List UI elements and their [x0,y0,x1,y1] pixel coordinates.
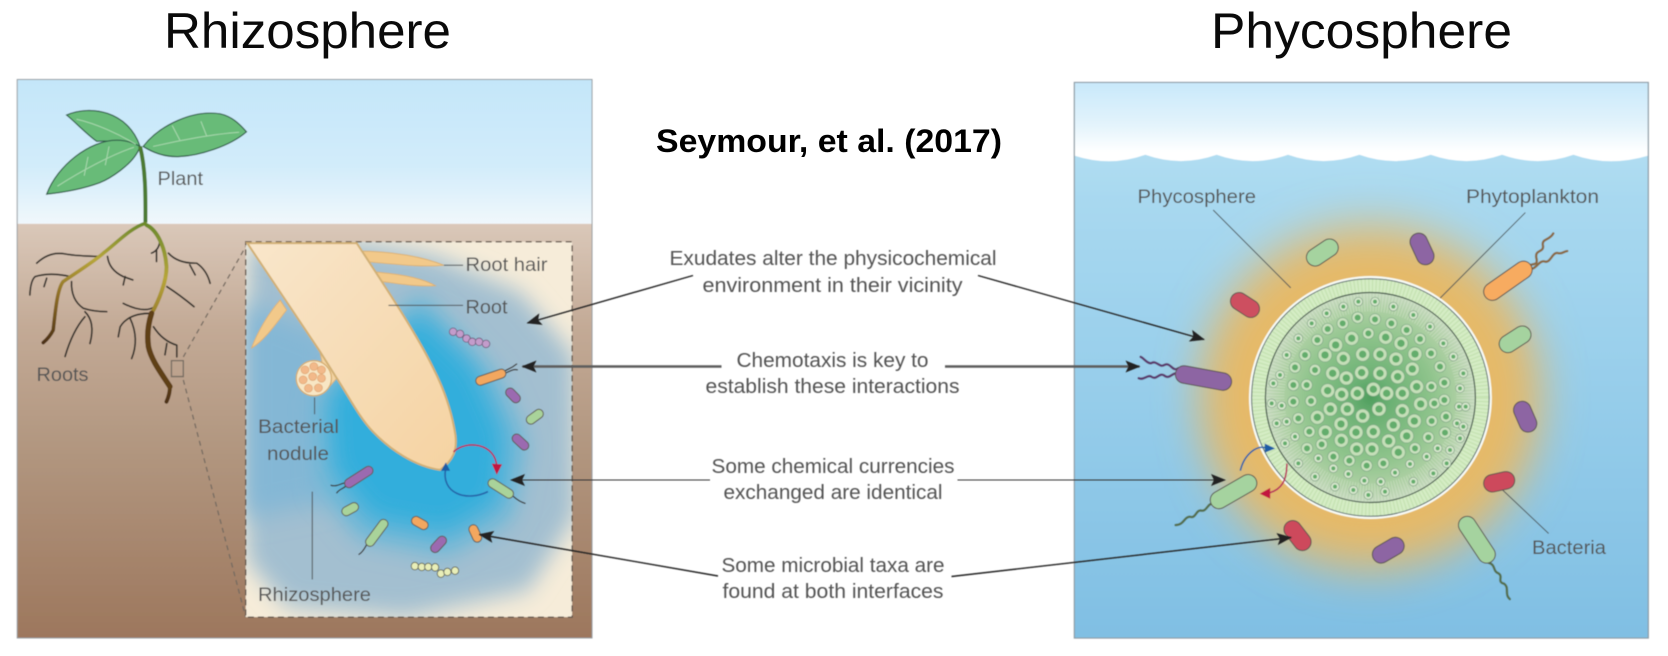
annotation: chemotaxis: Chemotaxis is key to [736,349,928,372]
bacteria in inset [331,364,539,554]
central annotations and arrows [480,247,1291,603]
exchange arrows in inset [441,445,502,496]
bacterial chain: purple [449,328,490,348]
annotation: chemical currencies: Some chemical currencies [712,455,954,478]
arrows: chemical currencies [511,479,1225,481]
label: Bacterial nodule: Bacterial [258,416,339,438]
magnifier square and dashed zoom lines [171,245,246,617]
annotation: chemotaxis [706,349,960,398]
cell wall [1249,276,1492,519]
icon: plant leaves and stem [47,110,246,223]
label: Bacteria: Bacteria [1532,537,1606,559]
bacterial chain: cream [411,562,459,577]
soil background [17,224,592,638]
exchange arrows at cell surface [1240,444,1287,499]
label: Root: Root [466,296,508,318]
label: Bacterial nodule: nodule [267,443,329,465]
water background [1074,82,1648,638]
bacteria bodies [1184,242,1528,554]
label: Phycosphere: Phycosphere [1138,186,1256,208]
annotation: chemical currencies [712,455,954,504]
icon: main roots [43,223,170,402]
leader lines [1213,210,1549,533]
sky background [17,79,592,224]
annotation: exudates: environment in their vicinity [702,274,963,297]
label leader lines in inset [312,265,463,579]
blue exudate glow [245,243,576,617]
title: Rhizosphere: Rhizosphere [164,2,451,59]
label: Root hair: Root hair [466,254,548,276]
label: Rhizosphere in inset: Rhizosphere [258,584,371,606]
title: Phycosphere: Phycosphere [1211,2,1512,59]
interior organelles: medium cells [1287,312,1452,472]
label: Phytoplankton: Phytoplankton [1466,186,1599,208]
annotation: exudates [670,247,996,297]
annotation: chemical currencies: exchanged are identical [724,481,942,504]
annotation: microbial taxa: Some microbial taxa are [722,554,944,577]
annotation: microbial taxa: found at both interfaces [722,580,944,603]
label: Plant: Plant [158,168,204,190]
label: Bacterial nodule [258,416,339,465]
arrows: exudates [528,276,1204,340]
panel: zoomed rhizosphere inset [245,242,576,617]
interior organelles: large central cells [1310,330,1428,460]
annotation: exudates: Exudates alter the physicochemical [670,247,996,270]
phytoplankton cell [1249,276,1492,519]
orange phycosphere glow [1200,226,1541,569]
main root [247,243,456,470]
bacteria outlines [1184,242,1528,554]
annotation: chemotaxis: establish these interactions [706,375,960,398]
bacterial nodule [296,351,337,396]
arrows: chemotaxis [522,365,1140,368]
arrows: microbial taxa [480,534,1291,576]
panel: rhizosphere illustration [17,79,592,638]
annotation: microbial taxa [722,554,944,603]
sky and wave surface [1074,82,1648,161]
label: Roots: Roots [36,364,89,386]
flagella [1139,233,1567,599]
interior organelles: small peripheral cells [1267,297,1470,500]
root hairs [251,251,444,348]
cell interior [1265,292,1475,502]
citation: Seymour et al.: Seymour, et al. (2017) [656,123,1002,159]
speckled outer cytoplasm [1275,302,1465,492]
panel: phycosphere illustration [1074,82,1648,638]
icon: thin roots [30,238,210,359]
